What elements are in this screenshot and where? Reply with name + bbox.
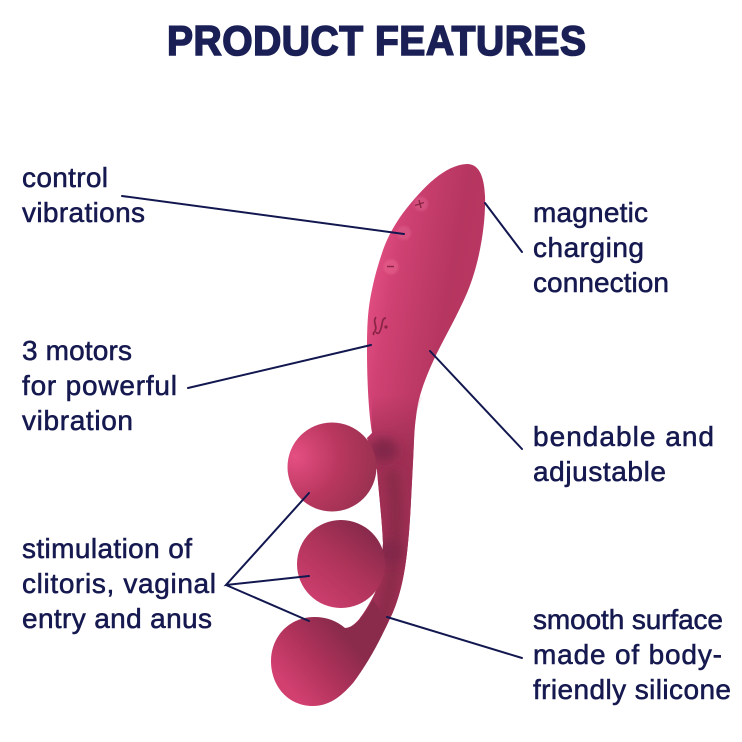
label: magnetic charging connection: charging bbox=[533, 232, 644, 263]
label: magnetic charging connection bbox=[533, 197, 669, 298]
label: bendable and adjustable: bendable and bbox=[533, 421, 714, 452]
label: magnetic charging connection: magnetic bbox=[533, 197, 648, 228]
label: bendable and adjustable bbox=[533, 421, 714, 487]
product: logo mark bbox=[373, 317, 387, 335]
label: smooth surface bbox=[533, 604, 731, 705]
label: control vibrations: control bbox=[22, 162, 108, 193]
label: smooth surface: made of body- bbox=[533, 639, 722, 670]
label: bendable and adjustable: adjustable bbox=[533, 456, 666, 487]
product: button middle bbox=[397, 226, 411, 240]
product: upper ball bbox=[288, 422, 376, 512]
label: smooth surface: smooth surface bbox=[533, 604, 723, 635]
label: smooth surface: friendly silicone bbox=[533, 674, 731, 705]
product: button plus bbox=[414, 197, 428, 211]
label: 3 motors for powerful vibration: for powerful bbox=[22, 370, 177, 401]
leader lines bbox=[122, 196, 522, 658]
label: stimulation: stimulation of bbox=[22, 533, 192, 564]
product: lower arm shading bbox=[360, 398, 422, 673]
label: 3 motors for powerful vibration: 3 motors bbox=[22, 335, 132, 366]
product: lower ball and arm base bbox=[271, 600, 388, 706]
label: 3 motors for powerful vibration bbox=[22, 335, 177, 436]
product: button minus bbox=[384, 260, 398, 274]
label: stimulation: clitoris, vaginal bbox=[22, 568, 216, 599]
label: control vibrations: vibrations bbox=[22, 197, 145, 228]
label: control vibrations bbox=[22, 162, 145, 228]
label: stimulation: entry and anus bbox=[22, 603, 212, 634]
product illustration bbox=[271, 164, 485, 706]
product: middle ball bbox=[297, 520, 385, 608]
title: PRODUCT FEATURES bbox=[167, 17, 586, 64]
product: main body bbox=[345, 164, 485, 683]
label: magnetic charging connection: connection bbox=[533, 267, 669, 298]
label: 3 motors for powerful vibration: vibration bbox=[22, 405, 133, 436]
label: stimulation bbox=[22, 533, 216, 634]
